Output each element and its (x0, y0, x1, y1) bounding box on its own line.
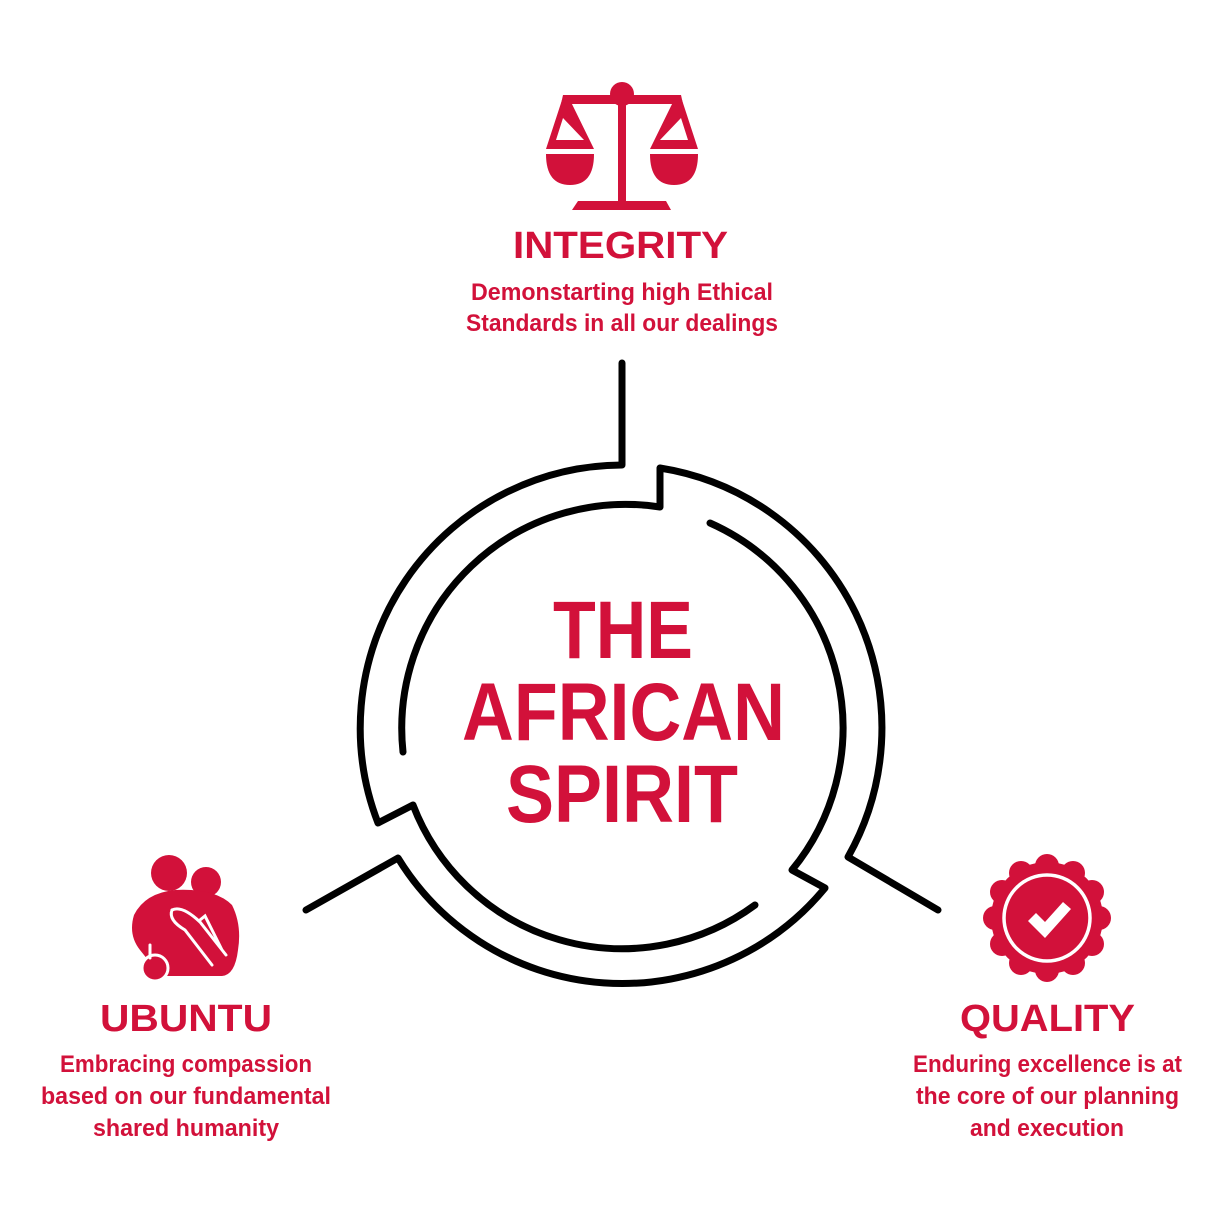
text: ubuntu description: Embracing compassion (60, 1051, 312, 1078)
text: quality description (913, 1051, 1182, 1142)
heading: quality: QUALITY (960, 998, 1135, 1040)
text: quality description: the core of our planning (916, 1083, 1179, 1110)
ring diagram (306, 363, 938, 984)
heading: ubuntu: UBUNTU (100, 998, 272, 1040)
text: ubuntu description (41, 1051, 331, 1142)
text: integrity description: Demonstarting high Ethical (471, 279, 773, 306)
center title: THE (553, 585, 693, 676)
heading: integrity: INTEGRITY (513, 225, 728, 267)
text: ubuntu description: based on our fundamental (41, 1083, 331, 1110)
text: ubuntu description: shared humanity (93, 1115, 280, 1142)
center title (462, 585, 785, 840)
icon: quality badge (983, 854, 1111, 982)
center title: AFRICAN (462, 667, 785, 758)
center title: SPIRIT (506, 749, 738, 840)
icon: ubuntu people (132, 855, 239, 981)
text: integrity description (466, 279, 778, 337)
text: quality description: and execution (970, 1115, 1124, 1142)
icon: scales (546, 82, 698, 210)
text: integrity description: Standards in all our dealings (466, 310, 778, 337)
text: quality description: Enduring excellence is at (913, 1051, 1182, 1078)
